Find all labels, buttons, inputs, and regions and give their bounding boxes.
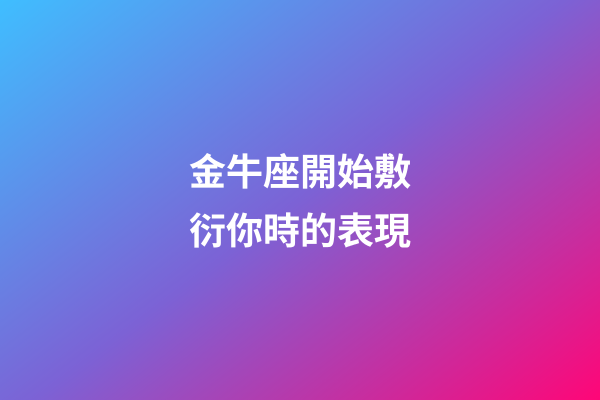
- title: 金牛座開始敷: [189, 152, 411, 193]
- title: 衍你時的表現: [189, 211, 411, 252]
- title: [189, 152, 411, 252]
